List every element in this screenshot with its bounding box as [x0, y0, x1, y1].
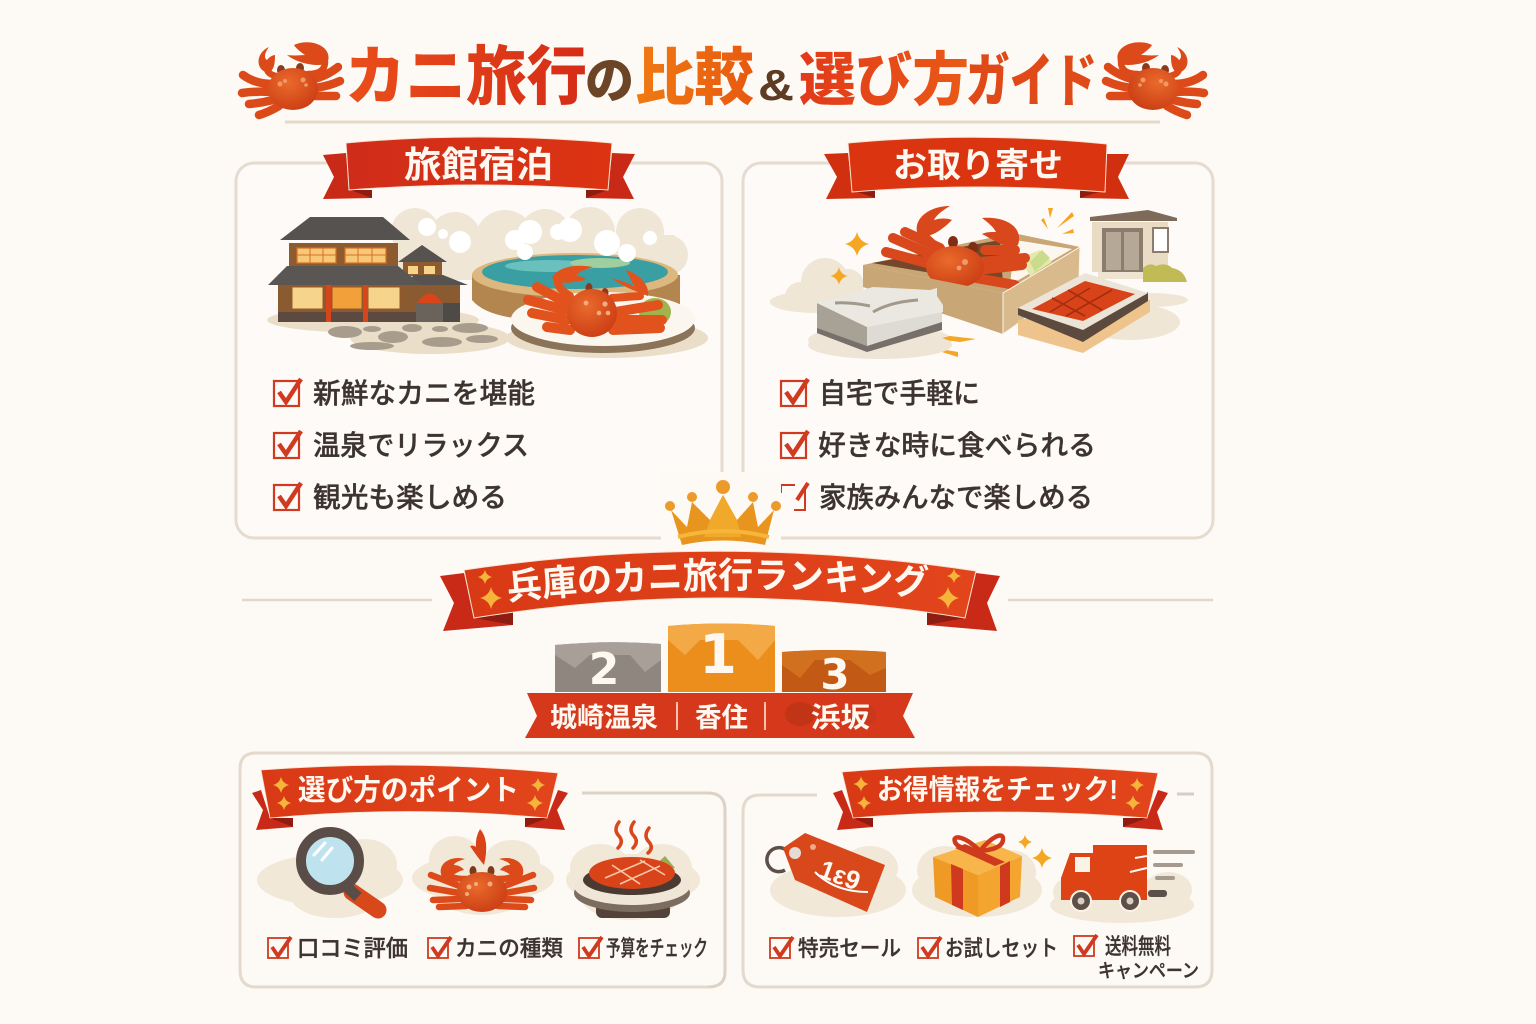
- icon: hot bowl: [566, 822, 700, 920]
- ribbon: ranking names: 香住: [695, 703, 748, 733]
- stepping stones: [328, 323, 498, 350]
- ribbon: お取り寄せ heading: お取り寄せ: [893, 147, 1063, 185]
- label: 送料無料: [1105, 934, 1171, 959]
- ribbon: ranking heading: [440, 550, 1000, 631]
- steam cloud backdrop: [391, 207, 688, 280]
- title: main heading: 選び方: [799, 48, 969, 113]
- sparkles: [830, 208, 1074, 357]
- title: [242, 41, 1204, 115]
- podium step 3: [782, 650, 886, 699]
- icon: delivery truck: [1050, 845, 1195, 923]
- label: キャンペーン: [1098, 961, 1199, 982]
- icon: gift box: [912, 835, 1052, 917]
- panel: お取り寄せ: [743, 137, 1213, 538]
- ribbon: 旅館宿泊 heading: 旅館宿泊: [404, 144, 553, 185]
- list item: 温泉でリラックス: [313, 430, 529, 461]
- icon: crown: [665, 480, 781, 545]
- list item: 新鮮なカニを堪能: [313, 378, 535, 409]
- podium step 1: 1: [699, 623, 737, 686]
- ribbon: お得情報 heading: お得情報をチェック!: [877, 774, 1118, 805]
- ribbon: ranking heading: 兵庫のカニ旅行ランキング: [508, 557, 928, 603]
- ribbon: お得情報 heading: [833, 766, 1168, 830]
- label: 予算をチェック: [606, 936, 708, 961]
- ribbon: お取り寄せ heading: [824, 137, 1129, 199]
- podium step 2: 2: [589, 644, 619, 695]
- list item: 好きな時に食べられる: [818, 430, 1096, 461]
- checklist: お得情報: [770, 934, 1199, 982]
- title: main heading: カニ旅行: [345, 41, 587, 113]
- icon: price tag: 1ε9: [815, 854, 865, 896]
- icon: price tag: [767, 833, 906, 917]
- checklist: 選び方 points: [268, 935, 708, 961]
- label: お試しセット: [945, 936, 1058, 961]
- list item: 観光も楽しめる: [313, 482, 507, 513]
- icon: wooden box with crab: [863, 206, 1080, 334]
- illustration: ryokan, onsen and crab plate: [267, 207, 708, 358]
- icon: white cold pack: [808, 287, 952, 359]
- ribbon: 選び方のポイント heading: 選び方のポイント: [298, 774, 519, 807]
- ribbon: 旅館宿泊 heading: [323, 137, 635, 199]
- ribbon: ranking names: 浜坂: [811, 702, 870, 733]
- icon: plate with crab: [506, 266, 708, 358]
- ribbon: ranking names: 城崎温泉: [550, 702, 658, 733]
- podium step 3: 3: [820, 650, 850, 699]
- label: [1074, 934, 1199, 982]
- icon: ryokan building: [268, 217, 468, 322]
- list item: 自宅で手軽に: [819, 378, 980, 409]
- label: 口コミ評価: [297, 935, 408, 961]
- panel: 旅館宿泊: [236, 137, 722, 538]
- podium: [525, 623, 915, 738]
- title: main heading: ガイド: [966, 49, 1097, 114]
- label: [579, 936, 708, 961]
- illustration: delivered crab box: [770, 206, 1188, 359]
- checklist: 旅館宿泊 benefits: [274, 378, 535, 513]
- ribbon: ranking names: [525, 693, 915, 738]
- icon: crab: [412, 829, 554, 915]
- checklist: お取り寄せ benefits: [781, 378, 1096, 513]
- title: main heading: 比較: [635, 44, 754, 113]
- cloud backdrop: [770, 258, 1188, 355]
- icon: left crab: [242, 42, 340, 115]
- title: main heading: [345, 41, 1097, 114]
- podium step 2: [555, 642, 661, 695]
- icon: house: [1090, 210, 1187, 282]
- label: カニの種類: [455, 936, 563, 961]
- steam puffs: [418, 218, 657, 262]
- list item: 家族みんなで楽しめる: [819, 482, 1093, 513]
- podium step 1: [668, 623, 775, 692]
- icon: right crab: [1106, 42, 1204, 115]
- panel: 選び方のポイント: [240, 753, 725, 987]
- title: main heading: &: [758, 61, 794, 110]
- icon: magnifying glass: [257, 832, 403, 918]
- icon: onsen tub: [472, 253, 680, 320]
- title: main heading: の: [585, 53, 634, 109]
- label: 特売セール: [798, 936, 901, 961]
- ribbon: 選び方のポイント heading: [252, 765, 568, 830]
- icon: meat tray: [1018, 273, 1150, 353]
- panel: お得情報をチェック: [724, 753, 1212, 987]
